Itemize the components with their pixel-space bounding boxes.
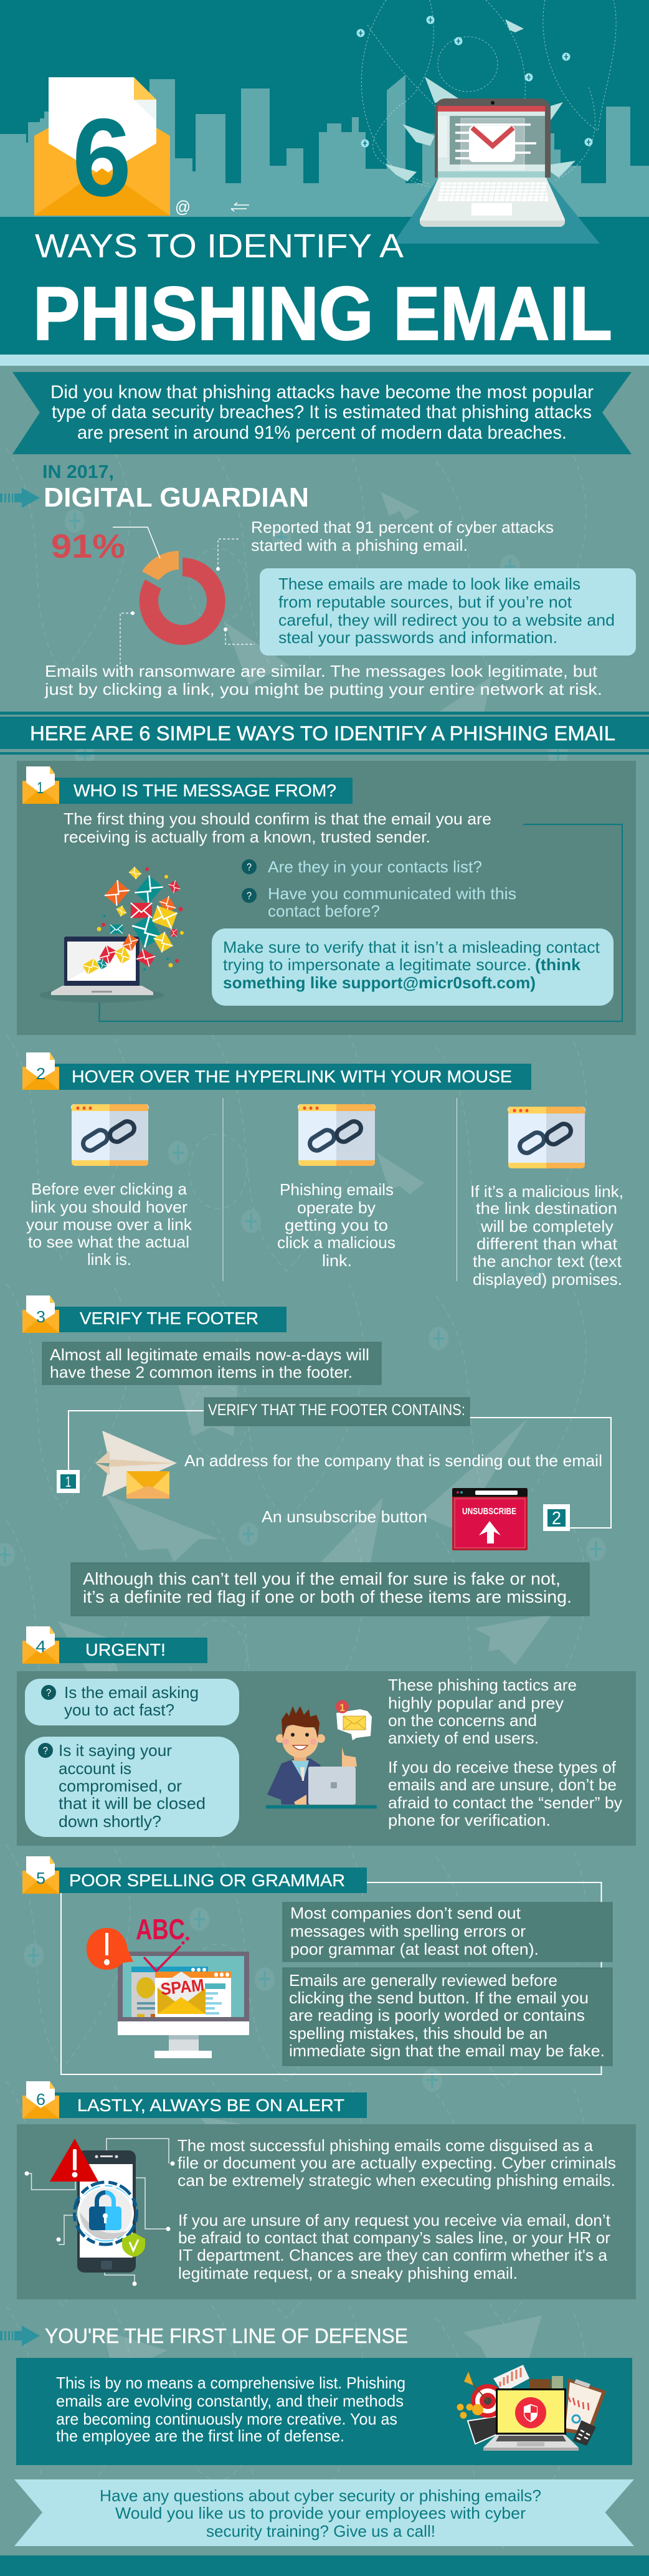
column 2: Phishing emails	[280, 1180, 394, 1199]
closing section	[0, 2324, 634, 2546]
closing heading: YOU'RE THE FIRST LINE OF DEFENSE	[45, 2324, 408, 2347]
warning note box: it’s a definite red flag if one or both of these items are missing.	[83, 1587, 572, 1606]
step 1 heading: WHO IS THE MESSAGE FROM?	[73, 781, 336, 800]
step 5 heading: POOR SPELLING OR GRAMMAR	[69, 1871, 345, 1890]
icon: link	[508, 1107, 585, 1168]
column 1: your mouse over a link	[26, 1215, 192, 1234]
column 3: If it’s a malicious link,	[470, 1182, 623, 1201]
callout: misleading contact	[212, 928, 613, 1006]
questions: contact before?	[268, 902, 380, 920]
icon: alert bubble	[87, 1928, 133, 1970]
alert text: If you are unsure of any request you receive via email, don’t	[178, 2211, 611, 2230]
ransomware text: Emails with ransomware are similar. The messages look legitimate, but	[45, 662, 598, 680]
step 6 heading	[22, 2081, 367, 2119]
laptop	[393, 98, 600, 244]
badge 2	[543, 1504, 570, 1531]
question bubble 1: you to act fast?	[64, 1701, 174, 1719]
at sign and arrows	[175, 198, 249, 216]
icon: paper plane with envelope	[95, 1431, 177, 1499]
step 3 heading: VERIFY THE FOOTER	[80, 1309, 258, 1328]
paper planes	[385, 19, 576, 181]
badge 1	[57, 1470, 80, 1493]
callout: reputable sources	[260, 568, 636, 656]
text box: reviewed emails: spelling mistakes, this should be an	[289, 2024, 547, 2043]
column 3: displayed) promises.	[473, 1270, 622, 1289]
step 4 heading: 4	[36, 1637, 46, 1656]
callout: reputable sources: careful, they will redirect you to a website and	[278, 611, 615, 629]
section banner: HERE ARE 6 SIMPLE WAYS TO IDENTIFY A PHISHING EMAIL	[30, 722, 615, 745]
callout: reputable sources: steal your passwords and information.	[278, 628, 557, 647]
panel: urgent	[17, 1671, 636, 1846]
text box: reviewed emails: clicking the send button. If the email you	[289, 1988, 589, 2007]
question bubble 2: Is it saying your	[59, 1741, 172, 1760]
source heading: DIGITAL GUARDIAN	[44, 482, 309, 513]
step 2 heading: 2	[36, 1064, 45, 1083]
step 1 heading	[22, 766, 353, 804]
big number 6: 6	[72, 95, 131, 219]
abc word: ABC	[136, 1913, 185, 1945]
ransomware text: just by clicking a link, you might be putting your entire network at risk.	[44, 680, 602, 699]
callout: reputable sources: These emails are made to look like emails	[278, 575, 580, 593]
step 2 heading	[22, 1052, 531, 1090]
intro ribbon: type of data security breaches? It is estimated that phishing attacks	[52, 402, 592, 422]
at sign and arrows: @	[175, 198, 191, 216]
call to action ribbon	[14, 2479, 634, 2546]
step 2 heading: HOVER OVER THE HYPERLINK WITH YOUR MOUSE	[72, 1067, 512, 1086]
floating badges	[356, 16, 593, 147]
report text	[251, 518, 554, 555]
network dashed paths	[361, 0, 616, 187]
intro box	[42, 1342, 381, 1385]
intro box: Almost all legitimate emails now-a-days will	[50, 1345, 369, 1364]
call to action ribbon: Have any questions about cyber security or phishing emails?	[100, 2486, 541, 2505]
year heading: IN 2017,	[42, 462, 114, 482]
urgent text: emails and are unsure, don’t be	[388, 1775, 617, 1794]
illustration: laptop with flying emails	[39, 867, 184, 1003]
verify heading box	[204, 1398, 470, 1426]
header banner	[0, 0, 649, 366]
step 1 heading: 1	[37, 778, 44, 797]
text box: reviewed emails: immediate sign that the email may be fake.	[289, 2041, 605, 2060]
envelope with number 6	[34, 77, 170, 219]
alert text	[178, 2136, 616, 2283]
text box: companies: messages with spelling errors or	[290, 1922, 526, 1940]
illustration: security laptop	[457, 2365, 606, 2451]
verify heading box: VERIFY THAT THE FOOTER CONTAINS:	[208, 1401, 465, 1419]
question bubble 2: that it will be closed	[59, 1794, 206, 1813]
icon: unsubscribe window	[452, 1488, 528, 1550]
illustration: man with laptop	[266, 1700, 377, 1808]
intro ribbon: Did you know that phishing attacks have become the most popular	[50, 382, 594, 403]
questions: ?	[247, 861, 252, 873]
step 3 heading	[22, 1295, 287, 1333]
illustration: man with laptop: 1	[339, 1702, 345, 1714]
panel: first line of defense: emails are evolving constantly, and their methods	[56, 2392, 404, 2410]
alert text: legitimate request, or a sneaky phishing email.	[178, 2264, 518, 2283]
text box: reviewed emails	[283, 1968, 612, 2066]
section: Digital Guardian statistic	[0, 462, 636, 699]
footer band	[0, 2555, 649, 2576]
alert text: The most successful phishing emails come disguised as a	[178, 2136, 594, 2155]
intro ribbon: are present in around 91% percent of modern data breaches.	[77, 422, 567, 443]
questions: Have you communicated with this	[268, 884, 516, 903]
unsubscribe label: An unsubscribe button	[262, 1507, 427, 1526]
step 4	[17, 1626, 636, 1846]
title: PHISHING EMAIL	[33, 271, 612, 356]
step 5 heading	[22, 1856, 367, 1894]
intro ribbon	[12, 372, 632, 454]
badge 2: 2	[552, 1509, 561, 1529]
questions: Are they in your contacts list?	[268, 857, 482, 876]
callout: misleading contact: something like support@micr0soft.com)	[223, 973, 536, 992]
icon: unsubscribe window: UNSUBSCRIBE	[462, 1506, 516, 1517]
callout: misleading contact: Make sure to verify that it isn’t a misleading contact	[223, 938, 600, 956]
column 1: link is.	[87, 1250, 131, 1269]
step 1 text	[64, 809, 491, 846]
column 1: Before ever clicking a	[31, 1180, 187, 1198]
step 4 heading	[22, 1626, 207, 1664]
column 2: link.	[322, 1251, 352, 1270]
urgent text: afraid to contact the “sender” by	[388, 1793, 622, 1812]
arrow	[0, 2326, 40, 2346]
91 percent figure: 91%	[51, 528, 125, 565]
urgent text	[388, 1676, 622, 1829]
panel: first line of defense: the employee are the first line of defense.	[56, 2426, 344, 2445]
ransomware text	[44, 662, 602, 699]
alert text: file or document you are actually expecting. Cyber criminals	[178, 2154, 616, 2172]
column 3: the link destination	[476, 1199, 617, 1218]
urgent text: highly popular and prey	[388, 1694, 564, 1712]
step 5 heading: 5	[36, 1869, 45, 1887]
question bubble 2: down shortly?	[59, 1812, 161, 1831]
badge 1: 1	[65, 1474, 71, 1491]
step 2	[22, 1052, 623, 1289]
step 3 heading: 3	[36, 1307, 45, 1326]
text box: reviewed emails: are reading is poorly worded or contains	[289, 2006, 585, 2025]
icon: link	[71, 1104, 149, 1166]
panel: always on alert	[17, 2124, 636, 2299]
column 2	[277, 1104, 396, 1270]
text box: companies: poor grammar (at least not often).	[290, 1940, 539, 1958]
questions	[242, 857, 516, 920]
panel: step 1	[17, 761, 636, 1035]
address text: An address for the company that is sending out the email	[184, 1451, 602, 1470]
title	[33, 227, 612, 356]
alert text: can be extremely strategic when executing phishing emails.	[178, 2171, 615, 2190]
step 5	[22, 1856, 612, 2074]
report text: Reported that 91 percent of cyber attacks	[251, 518, 554, 537]
question bubble 2	[25, 1737, 239, 1837]
warning note box	[71, 1563, 589, 1616]
title: WAYS TO IDENTIFY A	[35, 227, 404, 265]
urgent text: on the concerns and	[388, 1711, 537, 1730]
step 1 text: The first thing you should confirm is that the email you are	[64, 809, 491, 828]
step 6 heading: 6	[36, 2090, 45, 2109]
step 1 text: receiving is actually from a known, trusted sender.	[64, 828, 430, 846]
urgent text: phone for verification.	[388, 1811, 551, 1829]
alert text: be afraid to contact that company’s sales line, or your HR or	[178, 2228, 610, 2247]
illustration: spam on monitor	[87, 1913, 249, 2058]
illustration: phone with lock	[25, 2139, 174, 2286]
column 1	[26, 1104, 192, 1269]
questions: ?	[247, 890, 252, 902]
column 1: to see what the actual	[28, 1233, 189, 1251]
callout: reputable sources: from reputable sources, but if you’re not	[278, 593, 572, 611]
column 2: operate by	[297, 1198, 376, 1217]
column 3: will be completely	[480, 1217, 613, 1236]
question bubble 2: compromised, or	[59, 1777, 182, 1795]
question bubble 1: ?	[46, 1687, 51, 1699]
panel: first line of defense: are becoming continuously more creative. You as	[56, 2410, 397, 2428]
call to action ribbon: Would you like us to provide your employees with cyber	[115, 2504, 526, 2522]
urgent text: If you do receive these types of	[388, 1758, 617, 1777]
column 3: the anchor text (text	[473, 1252, 622, 1271]
report text: started with a phishing email.	[251, 536, 468, 555]
spam word: SPAM	[160, 1975, 205, 1999]
arrow	[0, 488, 40, 508]
column 1: link you should hover	[31, 1198, 187, 1216]
step 3	[22, 1295, 611, 1616]
step 6	[17, 2081, 636, 2299]
city skyline	[0, 75, 649, 217]
column 2: getting you to	[285, 1216, 388, 1234]
step 6 heading: LASTLY, ALWAYS BE ON ALERT	[77, 2096, 344, 2115]
urgent text: These phishing tactics are	[388, 1676, 577, 1694]
panel: first line of defense: This is by no means a comprehensive list. Phishing	[56, 2373, 405, 2392]
call to action ribbon: security training? Give us a call!	[206, 2522, 435, 2540]
step 4 heading: URGENT!	[85, 1640, 166, 1659]
icon: link	[298, 1104, 376, 1166]
question bubble 1	[25, 1679, 239, 1725]
column 2: click a malicious	[277, 1233, 396, 1252]
alert text: IT department. Chances are they can confirm whether it's a	[178, 2246, 608, 2264]
text box: reviewed emails: Emails are generally reviewed before	[289, 1971, 557, 1990]
text box: companies	[283, 1902, 612, 1962]
question bubble 1: Is the email asking	[64, 1683, 199, 1702]
question bubble 2: account is	[59, 1759, 131, 1778]
column 3	[470, 1107, 623, 1289]
urgent text: anxiety of end users.	[388, 1729, 539, 1747]
question bubble 2: ?	[43, 1745, 48, 1757]
callout: misleading contact: (think	[535, 955, 581, 974]
section banner	[0, 712, 649, 755]
panel: first line of defense	[16, 2358, 632, 2465]
column 3: different than what	[476, 1234, 618, 1253]
intro box: have these 2 common items in the footer.	[50, 1363, 353, 1381]
donut chart	[113, 527, 255, 669]
callout: misleading contact: trying to impersonate a legitimate source.	[223, 955, 531, 974]
warning note box: Although this can’t tell you if the email for sure is fake or not,	[83, 1569, 561, 1588]
text box: companies: Most companies don’t send out	[290, 1904, 521, 1922]
